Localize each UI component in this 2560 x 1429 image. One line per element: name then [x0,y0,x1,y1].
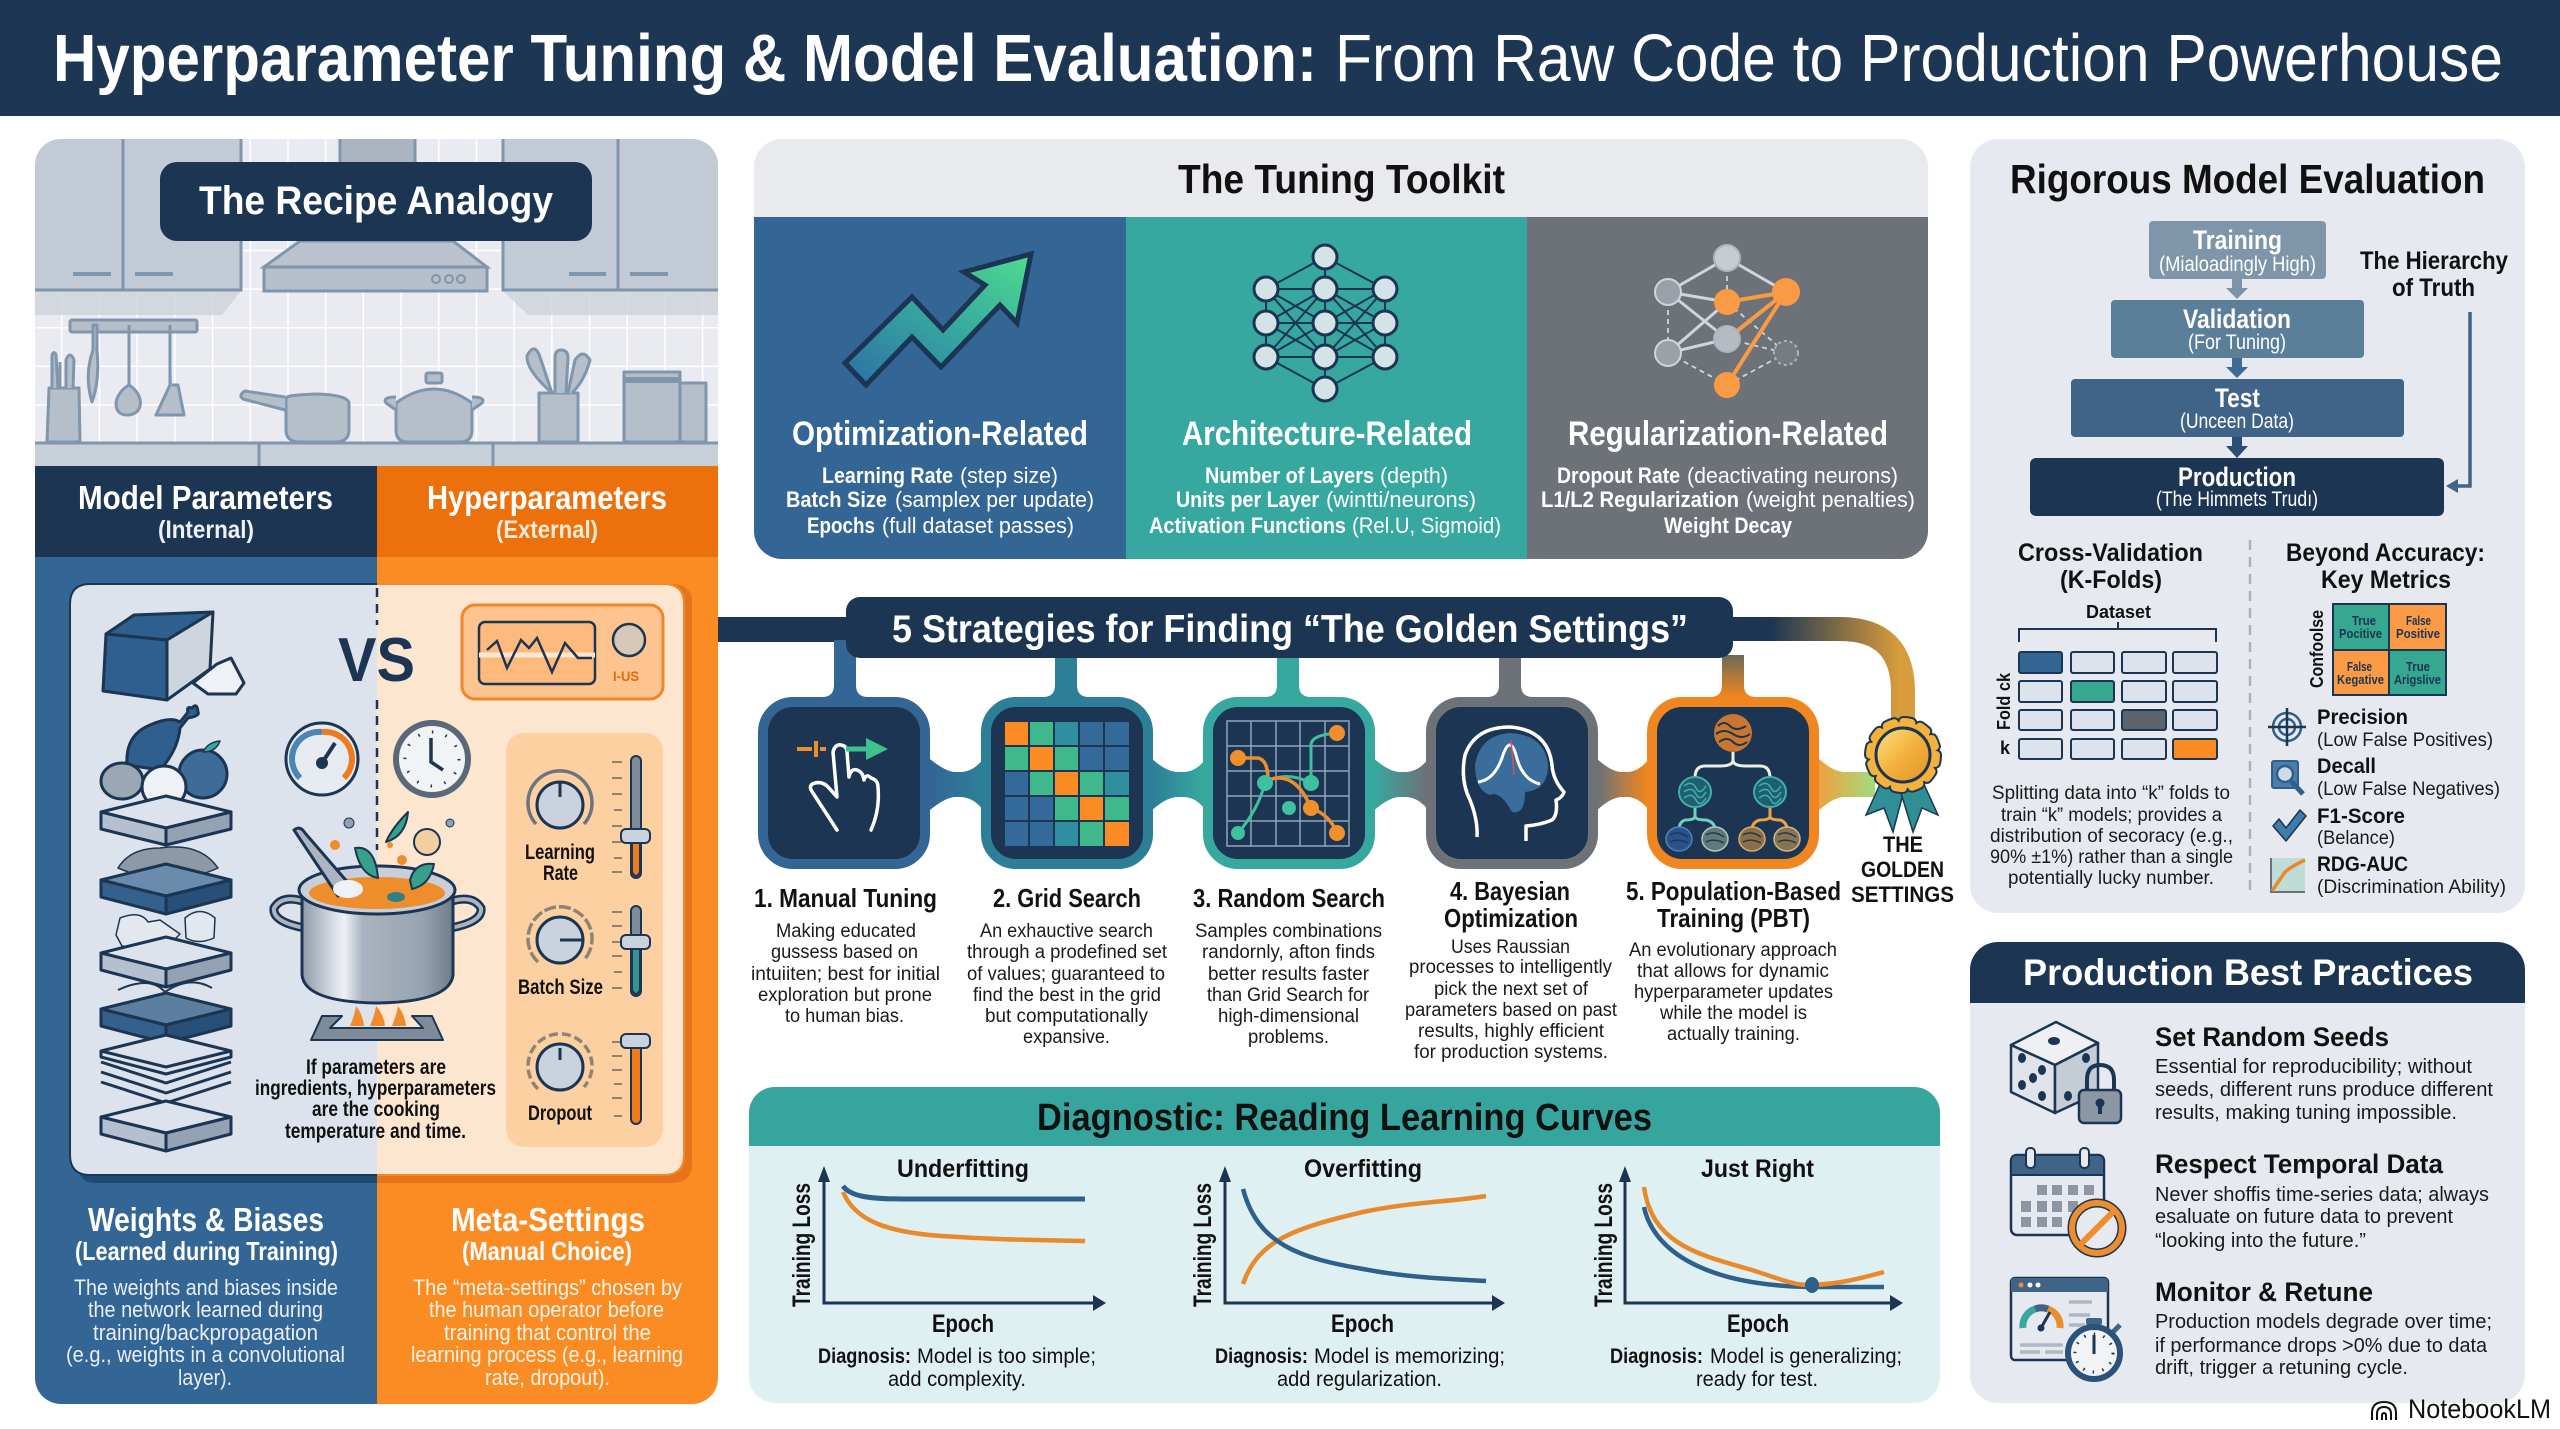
text: meta-settings: the human operator before [429,1297,664,1322]
text: bayesian optimization: Uses Raussian [1451,937,1570,958]
text: grid search: 2. Grid Search [993,883,1141,913]
text: weights and biases: Weights & Biases [88,1201,324,1238]
text: weights and biases: training/backpropagation [93,1320,318,1345]
chart: just right: Just Right [1701,1155,1815,1183]
text: meta-settings: training that control the [444,1320,651,1345]
chart: underfitting: Underfitting [897,1155,1029,1183]
column: regularization-related: L1/L2 Regularization [1541,487,1739,512]
text: grid search: of values; guaranteed to [967,964,1165,985]
chart: underfitting [788,1155,1106,1391]
icon: dice and lock [2011,1022,2121,1123]
heading: model parameters [78,479,333,544]
diagram: k-fold grid [2019,652,2217,759]
text: random search: than Grid Search for [1207,985,1370,1006]
text: bayesian optimization: pick the next set of [1434,979,1589,1000]
heading: recipe analogy pill: The Recipe Analogy [199,179,554,223]
diagram: hierarchy of truth pyramid: (Mialoadingly High) [2159,253,2316,276]
panel: hyperparameter controls: Batch Size [518,976,603,999]
column: architecture-related: (Rel.U, Sigmoid) [1352,513,1501,538]
label: the hierarchy of truth: of Truth [2392,274,2475,302]
chart: just right: ready for test. [1696,1368,1818,1391]
illustration: kitchen scene [33,137,720,469]
connectors: pipeline tubes [718,617,1903,814]
heading: diagnostic: Diagnostic: Reading Learning Curves [1037,1097,1652,1139]
diagram: confusion matrix: True [2406,659,2430,674]
panel: the tuning toolkit [754,139,1928,559]
label: VS: VS [338,626,415,695]
text: roc auc: (Discrimination Ability) [2317,877,2506,898]
diagram: confusion matrix: Kegative [2337,672,2384,687]
title bar [0,0,2560,116]
text: bayesian optimization [1405,876,1618,1063]
icon: golden settings medal [1866,722,1938,832]
chart: just right: Training Loss [1590,1183,1618,1307]
text: bayesian optimization: processes to intelligently [1409,957,1612,978]
text: the golden settings: GOLDEN [1861,857,1944,882]
text: manual tuning: 1. Manual Tuning [754,883,937,913]
text: recall [2317,755,2500,800]
column: optimization-related: Epochs [807,513,875,538]
chart: underfitting: Diagnosis: [818,1345,911,1368]
heading: recipe analogy pill [160,162,592,241]
column: optimization-related: (step size) [960,463,1058,488]
text: random search: better results faster [1208,964,1370,985]
column: optimization-related: (samplex per update) [895,487,1094,512]
column: optimization-related: (full dataset passes) [882,513,1074,538]
text: population-based training: while the model is [1659,1003,1807,1024]
text: set random seeds: Essential for reproducibility; without [2155,1056,2472,1078]
icon card: bayesian optimization [1431,702,1593,864]
icon: loss monitor: I-US [613,668,639,684]
icon: clock [396,723,468,795]
text: population-based training: An evolutionary approach [1629,940,1837,961]
text: the golden settings [1851,832,1954,907]
column: optimization-related [786,415,1094,538]
diagram: hierarchy of truth pyramid: Training [2193,225,2282,255]
diagram: hierarchy of truth pyramid: Validation [2183,304,2291,334]
panel: hyperparameter controls: Dropout [528,1102,592,1125]
text: analogy caption [255,1056,496,1143]
chart: overfitting: Diagnosis: [1215,1345,1308,1368]
text: meta-settings: Meta-Settings [451,1201,645,1238]
text: set random seeds: results, making tuning impossible. [2155,1102,2457,1124]
text: meta-settings [411,1201,683,1390]
heading: rigorous model evaluation: Rigorous Model Evaluation [2010,156,2485,202]
diagram: hierarchy of truth pyramid [2030,221,2444,516]
section: 5 strategies pipeline [718,597,1954,1063]
text: random search: 3. Random Search [1193,883,1385,913]
chart: just right: Epoch [1727,1310,1789,1338]
diagram: hierarchy of truth pyramid: (The Himmets Trudı) [2156,488,2318,511]
text: precision: Precision [2317,706,2408,729]
icon: recall magnifier [2272,761,2303,794]
chart: underfitting: Epoch [932,1310,994,1338]
text: monitor and retune: Monitor & Retune [2155,1277,2373,1307]
icon: temperature gauge [286,723,358,795]
column: optimization-related: Optimization-Related [792,415,1088,453]
column: regularization-related: Regularization-Related [1568,415,1888,453]
chart: overfitting [1189,1155,1505,1391]
column: optimization-related: Batch Size [786,487,887,512]
text: manual tuning: exploration but prone [758,985,932,1006]
section: key metrics: Beyond Accuracy: [2286,539,2485,567]
diagram: confusion matrix: Positive [2396,626,2440,641]
column: architecture-related: (wintti/neurons) [1326,487,1476,512]
heading: hyperparameters [427,479,667,544]
panel: the recipe analogy [33,137,720,1407]
icon: ingredient layer stack [101,612,244,1151]
column: architecture-related: Activation Functions [1149,513,1346,538]
icon: calendar with no sign [2011,1148,2122,1253]
text: set random seeds [2155,1022,2493,1124]
diagram: hierarchy of truth pyramid: Production [2178,462,2296,492]
column: regularization-related: (weight penalties) [1746,487,1915,512]
text: respect temporal data [2155,1149,2489,1252]
text: grid search: expansive. [1023,1027,1110,1048]
text: grid search: find the best in the grid [973,985,1161,1006]
text: population-based training [1626,876,1841,1045]
column: architecture-related: (depth) [1380,463,1448,488]
text: analogy caption: temperature and time. [285,1120,466,1143]
text: population-based training: actually training. [1667,1024,1800,1045]
section: key metrics: Key Metrics [2321,566,2451,594]
text: grid search: through a prodefined set [967,942,1168,963]
column: architecture-related: Architecture-Related [1182,415,1472,453]
panel: hyperparameter controls: Learning [525,841,595,864]
text: population-based training: that allows for dynamic [1637,961,1829,982]
column: regularization-related [1541,415,1915,538]
label: the hierarchy of truth: The Hierarchy [2360,247,2508,275]
chart: just right [1590,1155,1903,1391]
text: random search: Samples combinations [1195,921,1382,942]
section: cross-validation [1990,539,2233,889]
column: architecture-related: Number of Layers [1205,463,1374,488]
icon card: grid search [986,702,1148,864]
text: recall: (Low False Negatives) [2317,779,2500,800]
text: bayesian optimization: parameters based on past [1405,1000,1618,1021]
heading: hyperparameters: Hyperparameters [427,479,667,516]
diagram: confusion matrix: True [2352,613,2376,628]
diagram: confusion matrix: Arigslive [2394,672,2441,687]
text: roc auc: RDG-AUC [2317,853,2408,876]
text: analogy caption: ingredients, hyperparameters [255,1077,496,1100]
text: the golden settings: THE [1883,832,1923,857]
section: cross-validation: (K-Folds) [2060,566,2162,594]
text: monitor and retune: if performance drops >0% due to data [2155,1335,2488,1357]
section: cross-validation: 90% ±1%) rather than a single [1990,847,2233,868]
text: meta-settings: learning process (e.g., learning [411,1342,683,1367]
text: manual tuning: Making educated [776,921,916,942]
icon: network with dropout [1655,245,1800,398]
icon: precision target [2268,708,2306,746]
text: random search: randornly, afton finds [1202,942,1375,963]
icon: loss monitor [462,605,663,699]
arrow: hierarchy to production [2446,312,2470,493]
label: the hierarchy of truth [2360,247,2508,302]
icon card: population-based training [1652,702,1814,864]
panel: diagnostic learning curves [749,1087,1940,1403]
text: manual tuning: gussess based on [771,942,918,963]
text: population-based training: hyperparameter updates [1634,982,1833,1003]
text: grid search [967,883,1168,1048]
icon: roc curve [2271,858,2305,892]
diagram: hierarchy of truth pyramid: (For Tuning) [2188,331,2286,354]
text: set random seeds: Set Random Seeds [2155,1022,2389,1052]
heading: production best practices: Production Best Practices [2023,952,2473,993]
column: regularization-related: (deactivating neurons) [1687,463,1898,488]
text: bayesian optimization: Optimization [1444,903,1578,933]
text: set random seeds: seeds, different runs produce different [2155,1079,2493,1101]
text: random search: problems. [1248,1027,1329,1048]
column: architecture-related [1149,415,1501,538]
text: analogy caption: If parameters are [306,1056,446,1079]
text: population-based training: 5. Population-Based [1626,876,1841,906]
column: regularization-related: Dropout Rate [1557,463,1680,488]
text: bayesian optimization: results, highly efficient [1418,1021,1605,1042]
text: random search [1193,883,1385,1048]
text: respect temporal data: Never shoffis time-series data; always [2155,1184,2489,1206]
section: cross-validation: Splitting data into “k” folds to [1992,783,2230,804]
section: cross-validation: Fold ck [1994,672,2014,730]
icon: rising arrow [845,254,1031,385]
section: cross-validation: train “k” models; provides a [2001,805,2222,826]
text: respect temporal data: “looking into the future.” [2155,1230,2366,1252]
column: architecture-related: Units per Layer [1176,487,1319,512]
text: bayesian optimization: 4. Bayesian [1450,876,1570,906]
heading: 5 strategies: 5 Strategies for Finding “The Golden Settings” [892,608,1688,651]
icon: simmering pot on burner [274,812,481,1040]
icon card: random search [1208,702,1370,864]
text: grid search: but computationally [985,1006,1148,1027]
text: f1 score [2317,805,2405,849]
chart: underfitting: add complexity. [888,1368,1026,1391]
section: cross-validation: Cross-Validation [2018,539,2203,567]
text: monitor and retune: Production models degrade over time; [2155,1311,2492,1333]
text: manual tuning [751,883,940,1027]
panel: hyperparameter controls [506,733,663,1147]
text: grid search: An exhauctive search [980,921,1153,942]
diagram: confusion matrix: False [2347,659,2372,674]
text: monitor and retune [2155,1277,2492,1379]
section: cross-validation: Dataset [2086,602,2151,622]
text: precision [2317,706,2493,751]
text: analogy caption: are the cooking [312,1098,440,1121]
panel: production best practices [1970,942,2525,1403]
chart: overfitting: Model is memorizing; [1314,1345,1505,1368]
text: weights and biases: layer). [178,1365,232,1390]
icon: f1 check [2273,810,2306,841]
chart: just right: Model is generalizing; [1710,1345,1902,1368]
heading: tuning toolkit: The Tuning Toolkit [1178,156,1505,202]
text: roc auc [2317,853,2506,898]
diagram: confusion matrix: Pocitive [2339,626,2382,641]
text: manual tuning: intuiiten; best for initial [751,964,940,985]
text: meta-settings: rate, dropout). [485,1365,610,1390]
text: monitor and retune: drift, trigger a retuning cycle. [2155,1357,2408,1379]
section: cross-validation: potentially lucky number. [2008,868,2214,889]
section: cross-validation: k [2000,738,2011,758]
chart: underfitting: Model is too simple; [917,1345,1096,1368]
chart: just right: Diagnosis: [1610,1345,1703,1368]
text: f1 score: (Belance) [2317,828,2395,849]
text: meta-settings: (Manual Choice) [462,1236,632,1266]
text: recall: Decall [2317,755,2376,778]
diagram: hierarchy of truth pyramid: Test [2215,383,2260,413]
diagram: confusion matrix [2307,604,2446,695]
icon card: manual tuning [763,702,925,864]
column: regularization-related: Weight Decay [1664,513,1793,538]
heading: model parameters: Model Parameters [78,479,333,516]
text: precision: (Low False Positives) [2317,730,2493,751]
diagram: hierarchy of truth pyramid: (Unceen Data) [2180,410,2294,433]
heading: 5 strategies [846,597,1733,658]
text: weights and biases: the network learned during [88,1297,323,1322]
diagram: confusion matrix: False [2406,613,2431,628]
chart: underfitting: Training Loss [788,1183,816,1307]
text: manual tuning: to human bias. [785,1006,904,1027]
title bar: Hyperparameter Tuning & Model Evaluation: [53,21,1317,96]
text: f1 score: F1-Score [2317,805,2405,828]
section: cross-validation: distribution of secoracy (e.g., [1990,826,2233,847]
icon: dashboard with stopwatch [2011,1278,2120,1379]
text: the golden settings: SETTINGS [1851,882,1954,907]
logo: notebooklm: NotebookLM [2408,1394,2551,1424]
heading: model parameters: (Internal) [158,516,254,544]
text: weights and biases: (e.g., weights in a convolutional [66,1342,345,1367]
panel: rigorous model evaluation [1970,139,2525,913]
text: respect temporal data: esaluate on future data to prevent [2155,1206,2453,1228]
text: population-based training: Training (PBT) [1657,903,1810,933]
heading: hyperparameters: (External) [496,516,598,544]
panel: hyperparameter controls: Rate [543,862,578,885]
diagram: confusion matrix: Confoolse [2307,610,2327,688]
chart: overfitting: Epoch [1331,1310,1394,1338]
icon: neural network [1254,245,1397,401]
comparison card [70,584,692,1183]
chart: overfitting: Overfitting [1304,1155,1422,1183]
text: bayesian optimization: for production systems. [1414,1042,1608,1063]
chart: overfitting: Training Loss [1189,1183,1217,1307]
chart: overfitting: add regularization. [1277,1368,1442,1391]
text: meta-settings: The “meta-settings” chosen by [413,1275,682,1300]
column: optimization-related: Learning Rate [822,463,953,488]
text: weights and biases: The weights and biases inside [74,1275,338,1300]
text: weights and biases: (Learned during Training) [75,1236,338,1266]
section: key metrics [2268,539,2506,898]
text: weights and biases [66,1201,345,1390]
text: random search: high-dimensional [1218,1006,1359,1027]
text: respect temporal data: Respect Temporal Data [2155,1149,2444,1179]
